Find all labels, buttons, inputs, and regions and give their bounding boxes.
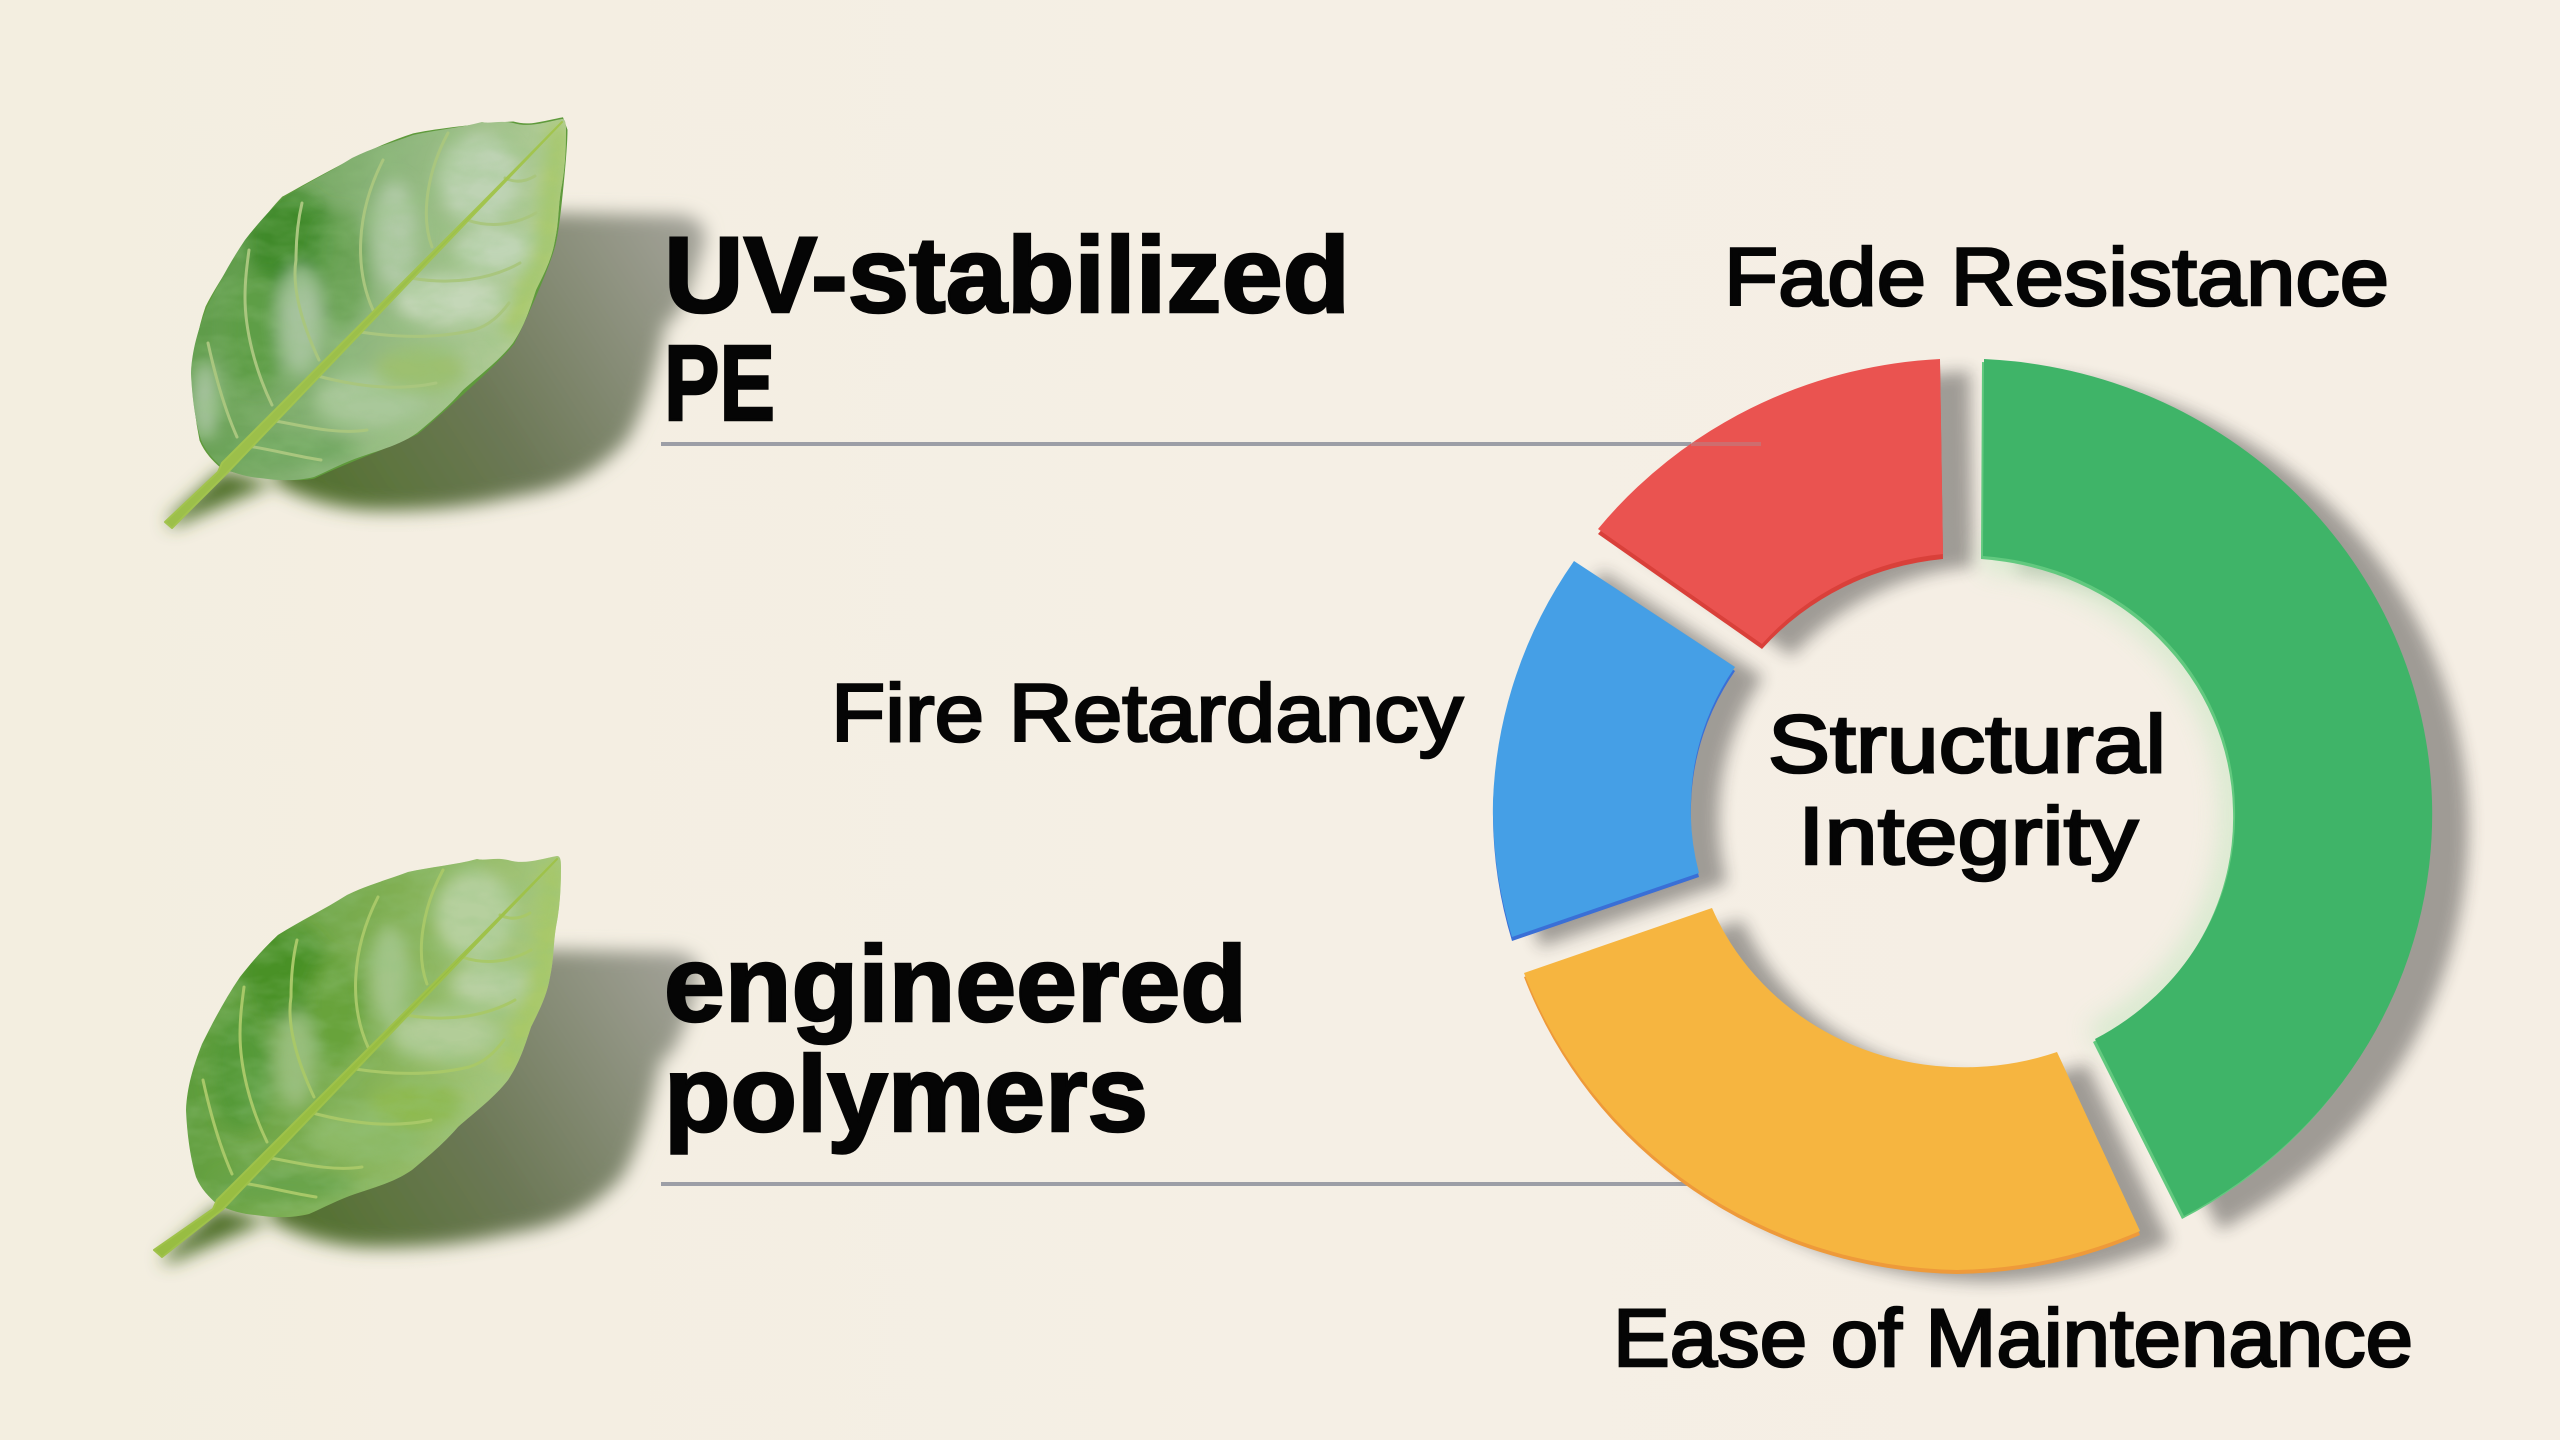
infographic canvas — [151, 117, 2478, 1368]
leaf mottling — [186, 866, 516, 1217]
veins — [208, 133, 536, 460]
inner green glow — [1983, 556, 2235, 1039]
segment: Fire Retardancy blue — [1493, 561, 1735, 941]
label: Structural Integrity: Structural — [1768, 699, 2166, 790]
veins — [203, 870, 531, 1197]
icon: leaf bottom — [154, 847, 700, 1264]
leader line top — [661, 442, 1691, 446]
faint leader line over red segment — [1691, 442, 1761, 446]
label: Ease of Maintenance: Ease of Maintenance — [1613, 1293, 2413, 1384]
heading: UV-stabilized PE: UV-stabilized — [664, 214, 1350, 335]
label: Fire Retardancy: Fire Retardancy — [831, 668, 1463, 759]
leader line bottom — [661, 1182, 1691, 1186]
label: Fade Resistance: Fade Resistance — [1724, 232, 2389, 323]
icon: leaf top — [165, 110, 705, 528]
label: Structural Integrity — [1768, 699, 2166, 882]
heading: engineered polymers: polymers — [664, 1033, 1148, 1154]
heading: engineered polymers — [664, 923, 1247, 1154]
midrib and stem — [165, 122, 562, 528]
segment shadows — [1521, 371, 2468, 1282]
donut chart — [1493, 359, 2468, 1282]
heading: UV-stabilized PE: PE — [664, 322, 775, 443]
midrib and stem — [154, 859, 557, 1257]
label: Structural Integrity: Integrity — [1798, 791, 2138, 882]
heading: engineered polymers: engineered — [664, 923, 1247, 1044]
segment: Structural Integrity green — [1981, 359, 2432, 1219]
segment: Fade Resistance red — [1598, 359, 1943, 649]
leaf mottling — [198, 141, 534, 454]
heading: UV-stabilized PE — [664, 214, 1350, 443]
segment: Ease of Maintenance orange — [1524, 908, 2140, 1274]
